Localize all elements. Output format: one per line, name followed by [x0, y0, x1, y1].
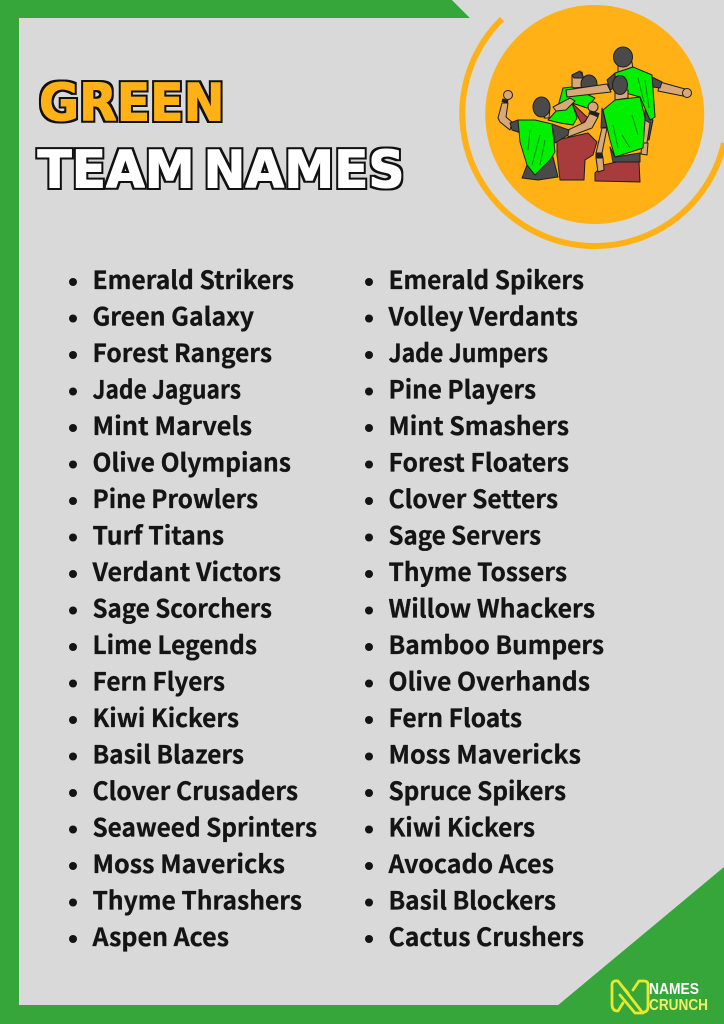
names: Sage Scorchers	[92, 590, 272, 626]
names: Jade Jumpers	[388, 334, 548, 370]
names: Volley Verdants	[388, 298, 578, 334]
names	[91, 261, 317, 954]
names: Olive Olympians	[92, 444, 291, 480]
names: Emerald Strikers	[92, 261, 294, 297]
names: Turf Titans	[92, 516, 224, 552]
left column list	[69, 261, 317, 954]
names: Cactus Crushers	[388, 918, 584, 954]
orange ring	[462, 19, 724, 246]
logo text: CRUNCH	[649, 997, 708, 1014]
right column list	[365, 261, 604, 954]
names: Clover Crusaders	[92, 772, 298, 808]
title	[38, 74, 404, 200]
names: Pine Players	[388, 370, 536, 406]
names: Kiwi Kickers	[388, 808, 535, 844]
logo text: NAMES	[649, 981, 699, 998]
names: Verdant Victors	[91, 553, 281, 589]
player centre back	[548, 71, 611, 180]
names: Forest Floaters	[388, 444, 569, 480]
orange circle	[485, 5, 704, 224]
bullets	[69, 278, 77, 943]
names: Lime Legends	[92, 626, 257, 662]
names: Basil Blockers	[388, 882, 556, 918]
names: Moss Mavericks	[388, 736, 581, 772]
player back right	[607, 47, 692, 140]
names: Pine Prowlers	[92, 480, 258, 516]
names: Basil Blazers	[92, 736, 244, 772]
names: Clover Setters	[388, 480, 558, 516]
illustration: players celebrating	[498, 47, 692, 182]
title line: GREEN: GREEN	[39, 74, 224, 134]
names: Aspen Aces	[92, 918, 229, 954]
title line: TEAM NAMES: TEAM NAMES	[38, 140, 404, 200]
names: Green Galaxy	[92, 298, 255, 334]
names: Emerald Spikers	[388, 261, 584, 297]
names: Olive Overhands	[388, 662, 590, 698]
names: Mint Marvels	[92, 407, 252, 443]
logo: Names Crunch	[612, 981, 708, 1014]
names: Fern Flyers	[92, 662, 225, 698]
names: Sage Servers	[388, 516, 541, 552]
bottom right green corner	[557, 867, 724, 1006]
names	[388, 261, 604, 954]
bullets	[365, 278, 373, 943]
names: Willow Whackers	[388, 590, 595, 626]
names: Thyme Tossers	[388, 553, 567, 589]
names: Seaweed Sprinters	[92, 808, 317, 844]
names: Kiwi Kickers	[92, 699, 239, 735]
names: Bamboo Bumpers	[388, 626, 604, 662]
player front right	[595, 76, 650, 182]
names: Jade Jaguars	[92, 370, 241, 406]
names: Mint Smashers	[388, 407, 569, 443]
logo mark	[612, 981, 648, 1013]
names: Spruce Spikers	[388, 772, 566, 808]
names: Fern Floats	[388, 699, 522, 735]
names: Forest Rangers	[92, 334, 272, 370]
logo text	[649, 981, 708, 1014]
names: Avocado Aces	[388, 845, 554, 881]
names: Thyme Thrashers	[92, 882, 302, 918]
names: Moss Mavericks	[92, 845, 285, 881]
player front left	[498, 90, 599, 180]
